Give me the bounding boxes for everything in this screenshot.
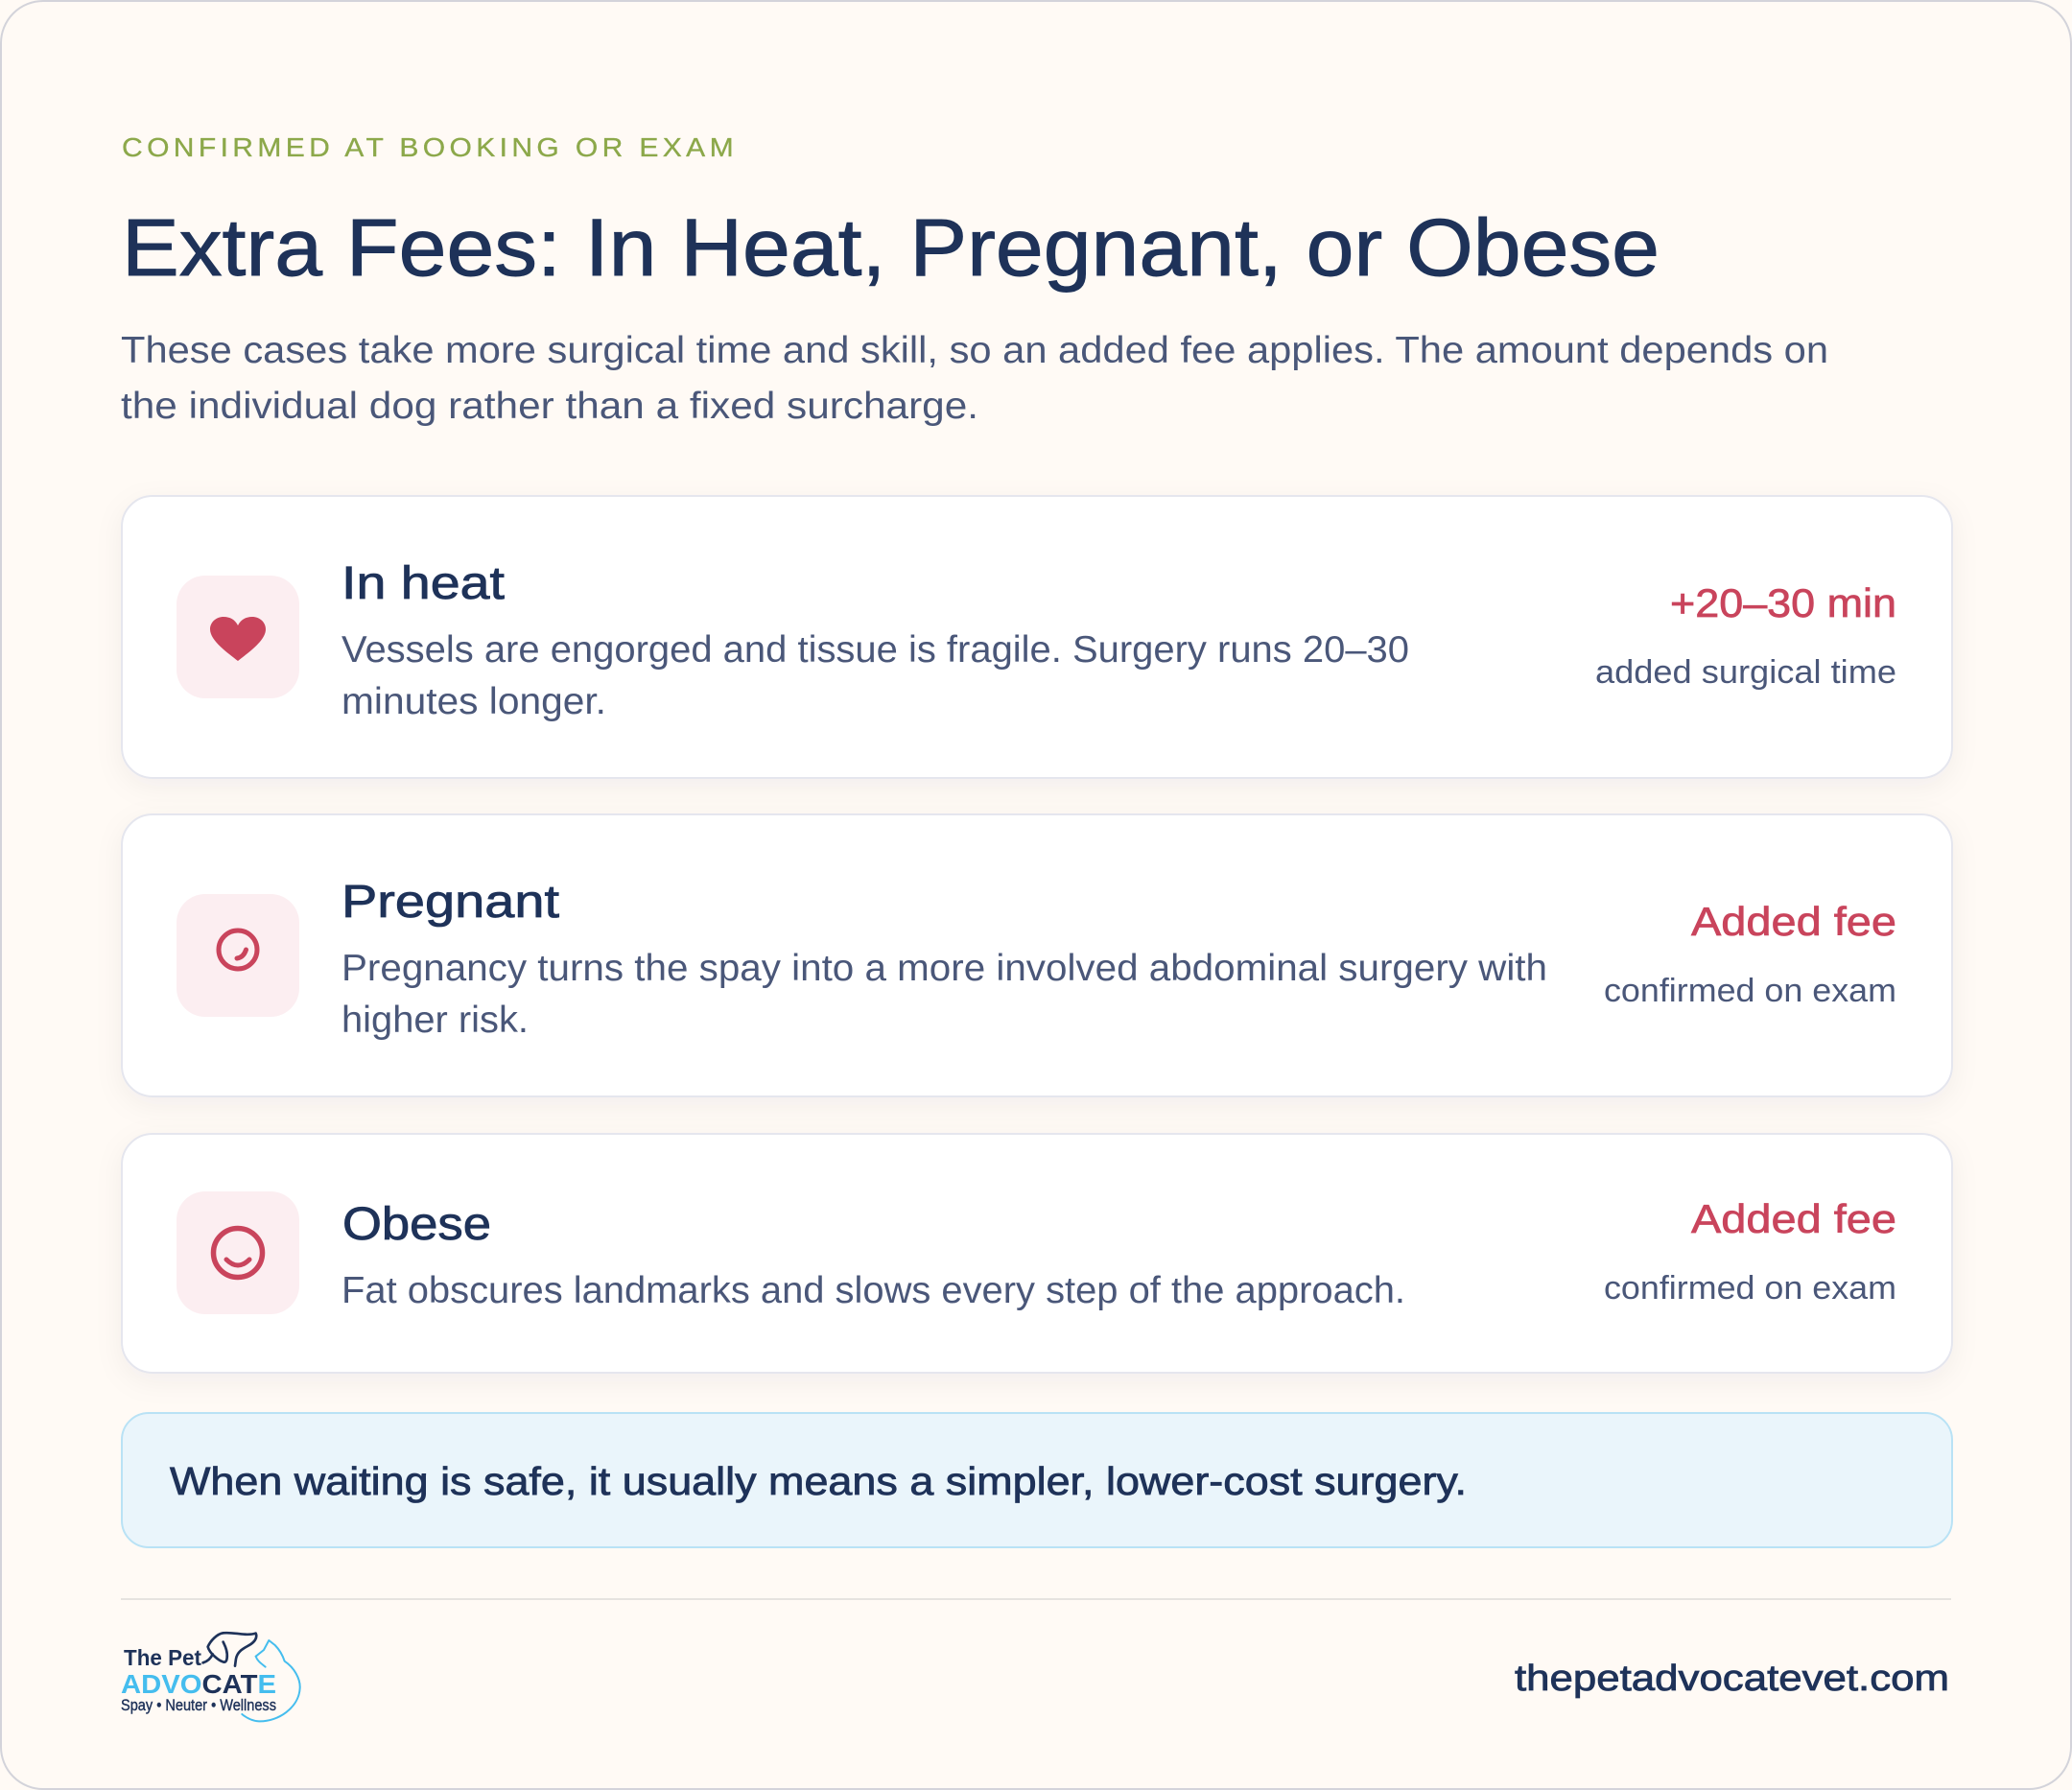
- value note: confirmed on exam: [1604, 1270, 1896, 1307]
- value note: confirmed on exam: [1604, 973, 1896, 1009]
- intro text: These cases take more surgical time and skill, so an added fee applies. The amount depends on: [121, 330, 1828, 371]
- icon: heart: [177, 576, 299, 698]
- callout: [122, 1413, 1952, 1547]
- value: added fee: Added fee: [1691, 1196, 1896, 1241]
- card heading: In heat: In heat: [341, 558, 505, 609]
- logo wordmark: The Pet: The Pet: [124, 1645, 201, 1670]
- icon: round face: [177, 1191, 299, 1314]
- card description: higher risk.: [341, 1000, 529, 1041]
- card description: Vessels are engorged and tissue is fragile. Surgery runs 20–30: [341, 629, 1409, 671]
- value note: added surgical time: [1595, 654, 1896, 691]
- card description: minutes longer.: [341, 681, 606, 722]
- card description: [341, 629, 1409, 722]
- card description: Fat obscures landmarks and slows every step of the approach.: [341, 1270, 1405, 1311]
- card heading: Pregnant: Pregnant: [341, 877, 559, 928]
- intro text: [121, 330, 1828, 427]
- logo tagline: Spay • Neuter • Wellness: [121, 1697, 276, 1714]
- icon: circle with small arc: [177, 894, 299, 1017]
- callout: When waiting is safe, it usually means a simpler, lower-cost surgery.: [170, 1459, 1467, 1503]
- intro text: the individual dog rather than a fixed surcharge.: [121, 386, 978, 427]
- card description: [341, 948, 1547, 1041]
- eyebrow label: CONFIRMED AT BOOKING OR EXAM: [122, 132, 738, 162]
- card description: Pregnancy turns the spay into a more involved abdominal surgery with: [341, 948, 1547, 989]
- logo: [121, 1633, 300, 1721]
- value: added time: +20–30 min: [1670, 580, 1896, 625]
- value: added fee: Added fee: [1691, 899, 1896, 944]
- panel: pregnant card: [122, 814, 1952, 1096]
- logo wordmark: ADVOCATE: ADVOCATE: [121, 1669, 276, 1699]
- card heading: Obese: Obese: [342, 1199, 491, 1250]
- footer website: thepetadvocatevet.com: [1515, 1659, 1949, 1699]
- title: Extra Fees: In Heat, Pregnant, or Obese: [122, 202, 1660, 293]
- panel: obese card: [122, 1134, 1952, 1373]
- panel: in heat card: [122, 496, 1952, 778]
- icon: dog and cat outline: [203, 1633, 300, 1721]
